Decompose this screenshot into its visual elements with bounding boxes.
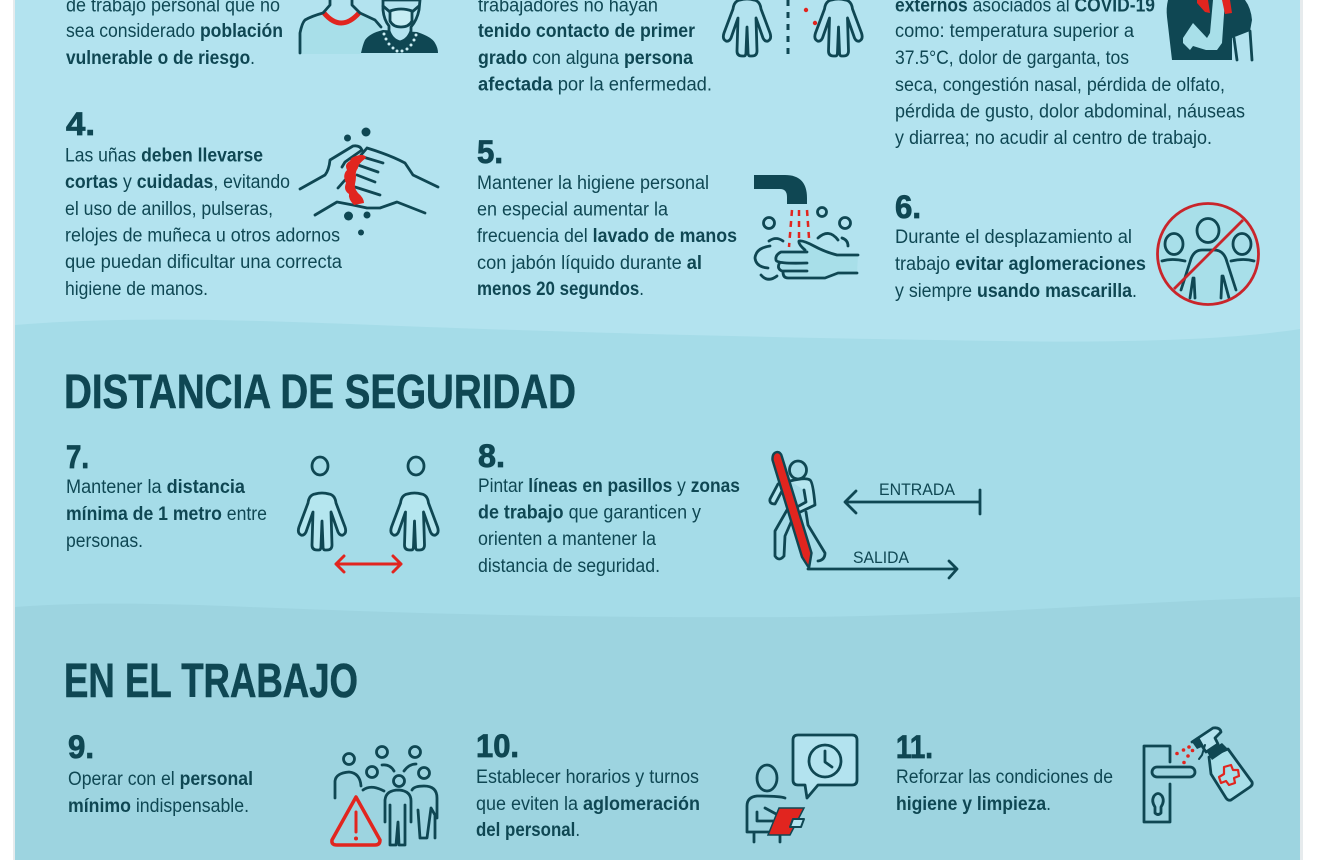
item 8: paint lines (478, 438, 980, 578)
item 5 text: en especial aumentar la (477, 200, 668, 220)
item 2: no first-degree contact (478, 0, 862, 96)
item 4 text (65, 146, 342, 300)
item 1: vulnerable population (66, 0, 438, 69)
item 4 text: relojes de muñeca u otros adornos (65, 226, 340, 246)
item 4 text: el uso de anillos, pulseras, (65, 199, 273, 220)
item 1 text: sea considerado población (66, 21, 283, 42)
item 6: avoid crowds (895, 189, 1258, 304)
item 11 text: higiene y limpieza. (896, 794, 1051, 815)
item 5 text: con jabón líquido durante al (477, 253, 702, 274)
item 4: nails (65, 106, 438, 300)
item 9 text (68, 769, 253, 817)
number 6: 6. (895, 189, 921, 225)
item 1 text (66, 0, 283, 69)
item 9: minimum staff (68, 729, 437, 845)
number 9: 9. (68, 729, 94, 765)
icon: person coughing into elbow (1167, 0, 1252, 60)
item 4 text: higiene de manos. (65, 279, 208, 300)
item 8 text: Pintar líneas en pasillos y zonas (478, 476, 740, 497)
number 10: 10. (476, 728, 519, 764)
number 5: 5. (477, 134, 503, 170)
item 7 text: mínima de 1 metro entre (66, 504, 267, 525)
item 11 text (896, 767, 1113, 815)
item 8 text: de trabajo que garanticen y (478, 502, 701, 524)
item 5 text (477, 173, 737, 300)
item 5 text: Mantener la higiene personal (477, 173, 709, 194)
label: entrada: ENTRADA (879, 480, 956, 499)
icon: door handle and spray bottle (1144, 728, 1252, 822)
item 3: symptoms (895, 0, 1252, 149)
item 6 text: y siempre usando mascarilla. (895, 281, 1137, 302)
heading: en el trabajo: EN EL TRABAJO (64, 655, 358, 708)
number 4: 4. (66, 106, 95, 142)
item 2 text (478, 0, 712, 96)
item 3 text: 37.5°C, dolor de garganta, tos (895, 48, 1129, 69)
item 10 text: que eviten la aglomeración (476, 794, 700, 815)
item 4 text: que puedan dificultar una correcta (65, 252, 342, 273)
item 2 text: tenido contacto de primer (478, 21, 696, 42)
number 11: 11. (896, 729, 933, 765)
item 11: hygiene and cleaning (896, 728, 1252, 822)
item 4 text: cortas y cuidadas, evitando (65, 172, 290, 193)
number 7: 7. (66, 439, 89, 475)
item 3 text: seca, congestión nasal, pérdida de olfato, (895, 75, 1225, 96)
item 1 text: vulnerable o de riesgo. (66, 48, 255, 69)
item 8 text: orienten a mantener la (478, 529, 656, 550)
icon: no crowds prohibition sign (1158, 204, 1258, 304)
item 8 text: distancia de seguridad. (478, 556, 660, 577)
icon: group of people with warning triangle (332, 746, 437, 845)
item 10 text (476, 767, 700, 841)
icon: faucet and soapy hand (754, 175, 858, 279)
item 3 text: como: temperatura superior a (895, 21, 1134, 42)
item 10 text: del personal. (476, 820, 580, 841)
item 7 text: personas. (66, 531, 143, 552)
item 2 text: grado con alguna persona (478, 48, 693, 69)
item 5 text: frecuencia del lavado de manos (477, 226, 737, 247)
icon: person painting entrada and salida lines (770, 452, 980, 578)
item 3 text: pérdida de gusto, dolor abdominal, náuseas (895, 102, 1245, 122)
item 6 text: trabajo evitar aglomeraciones (895, 254, 1146, 275)
item 3 text (895, 0, 1245, 149)
item 7 text: Mantener la distancia (66, 477, 245, 498)
item 11 text: Reforzar las condiciones de (896, 767, 1113, 788)
heading: distancia de seguridad: DISTANCIA DE SEGURIDAD (64, 366, 576, 419)
item 6 text: Durante el desplazamiento al (895, 227, 1132, 248)
item 10: schedules and shifts (476, 728, 857, 842)
item 10 text: Establecer horarios y turnos (476, 767, 699, 788)
item 7 text (66, 477, 267, 552)
icon: hands and nails (300, 128, 438, 236)
label: salida: SALIDA (853, 548, 910, 567)
item 6 text (895, 227, 1146, 302)
number 8: 8. (478, 438, 505, 474)
item 5: hand washing (477, 134, 858, 300)
item 9 text: mínimo indispensable. (68, 796, 249, 817)
item 8 text (478, 476, 740, 577)
item 5 text: menos 20 segundos. (477, 279, 644, 300)
icon: two people with masks (300, 0, 438, 54)
item 7: minimum distance (66, 439, 438, 572)
item 4 text: Las uñas deben llevarse (65, 146, 263, 166)
icon: two people separated by dashed line (723, 0, 862, 58)
icon: two people with distance arrow (298, 457, 438, 572)
item 3 text: y diarrea; no acudir al centro de trabajo. (895, 128, 1212, 149)
item 2 text: afectada por la enfermedad. (478, 74, 712, 96)
icon: person with clipboard and clock bubble (747, 735, 857, 842)
item 9 text: Operar con el personal (68, 769, 253, 790)
